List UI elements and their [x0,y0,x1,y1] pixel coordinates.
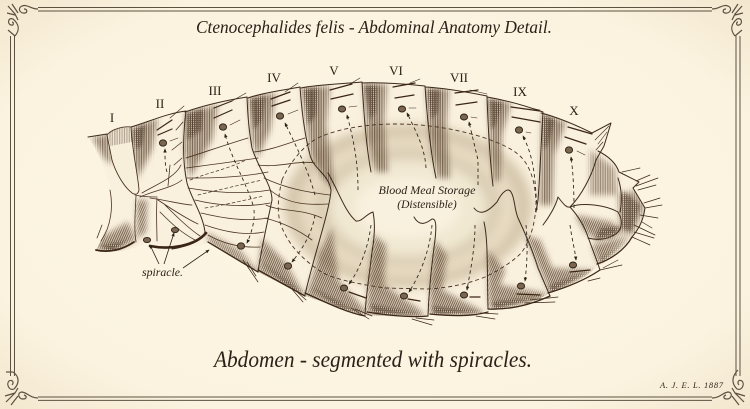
label: VII: VII [450,70,468,85]
flea abdomen illustration [88,66,662,326]
title: Ctenocephalides felis - Abdominal Anatomy Detail. [196,17,552,37]
heavy body contour shading [96,233,632,317]
storage outline dashed [278,124,536,289]
corner ornament: top left [7,4,38,36]
body silhouette fill [88,82,645,316]
label: V: V [329,63,339,78]
segment numerals [110,63,579,125]
label: III: III [208,83,222,98]
spiracle pointer dashed lines [165,113,576,292]
storage label: Blood Meal Storage [378,185,476,197]
spiracle callout with arrows: spiracle. [142,265,183,279]
label: I: I [110,110,114,125]
shading and hatching: upper segments [90,82,644,238]
signature: A. J. E. L. 1887 [659,380,724,390]
label: X: X [569,103,579,118]
cream flap of first segment [107,127,139,194]
corner ornament: top right [712,4,743,36]
label: VI: VI [389,63,403,78]
corner ornament: bottom right [712,370,745,405]
shading and hatching: lower segments [96,196,631,316]
bottom caption: Abdomen - segmented with spiracles. [212,347,532,372]
panel: blood meal storage tint [284,124,532,288]
spiracle callout with arrows [142,233,209,279]
dorsal marks and bristles [157,78,662,325]
segment contour lines [88,82,645,315]
label: II: II [156,96,164,111]
left lobe and stalk lines [97,190,157,242]
label: IX: IX [513,84,527,99]
storage label: (Distensible) [397,199,457,211]
corner ornament: bottom left [5,372,38,405]
wrinkle lines on anterior segments [97,122,330,247]
spiracles [143,106,577,299]
dense cross hatching in deepest shadows [100,83,642,316]
label: IV: IV [267,70,281,85]
storage label [378,185,476,211]
